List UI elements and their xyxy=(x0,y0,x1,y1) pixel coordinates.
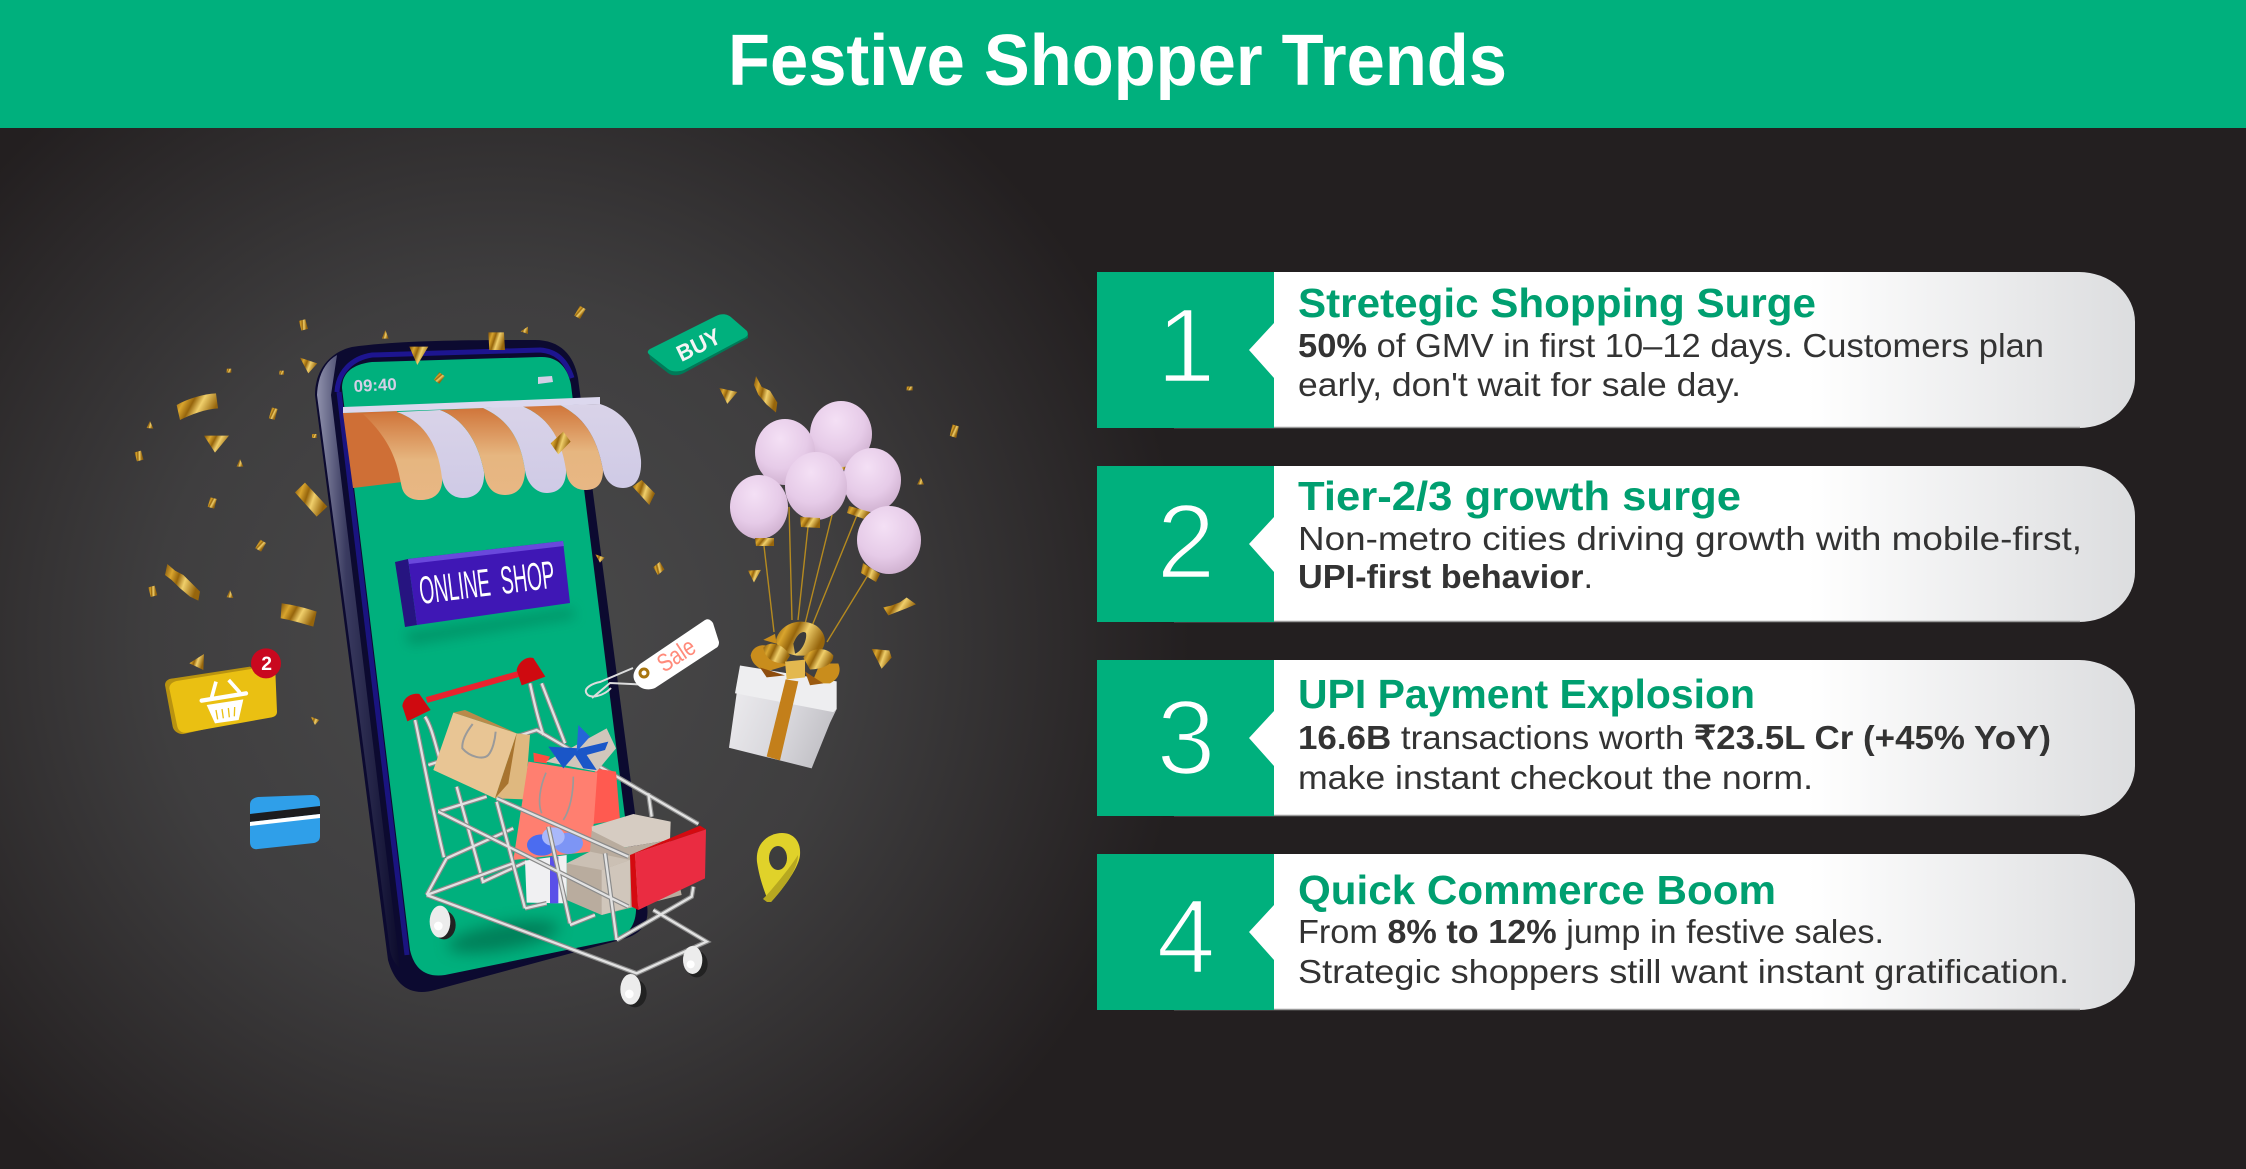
cart shadow xyxy=(445,914,561,960)
balloon gift xyxy=(729,401,921,768)
balloons xyxy=(730,401,921,582)
cart wheels xyxy=(430,906,708,1007)
sale tag: Sale xyxy=(652,633,701,678)
card 3 text line 1: 16.6B transactions worth ₹23.5L Cr (+45% YoY) xyxy=(1298,719,2051,756)
gift box xyxy=(729,622,840,768)
status time: 09:40 xyxy=(353,375,397,396)
card 3 heading: UPI Payment Explosion xyxy=(1298,671,1755,717)
stacked boxes xyxy=(567,814,682,915)
header band xyxy=(0,0,2246,128)
balloon strings xyxy=(764,507,868,642)
credit card icon xyxy=(250,795,320,849)
card 1 text line 1: 50% of GMV in first 10–12 days. Customers plan xyxy=(1298,327,2044,364)
card 4 heading: Quick Commerce Boom xyxy=(1298,867,1776,913)
red shopping bag xyxy=(513,753,620,860)
basket notification: 2 xyxy=(261,654,272,675)
battery icon xyxy=(538,376,553,384)
card 2 heading: Tier-2/3 growth surge xyxy=(1298,473,1741,519)
number 2: 2 xyxy=(1157,483,1215,601)
card 2 xyxy=(1097,466,2135,622)
phone xyxy=(315,340,648,992)
card 4 text line 1: From 8% to 12% jump in festive sales. xyxy=(1298,913,1884,950)
card 1 xyxy=(1097,272,2135,428)
illustration: online shopping phone xyxy=(135,306,959,1007)
card 2 text line 2: UPI-first behavior . xyxy=(1298,558,1593,595)
shopping cart xyxy=(402,658,708,1007)
small gift with blue ribbon xyxy=(546,725,616,772)
online shop sign: ONLINE SHOP xyxy=(417,554,557,613)
cart back wires xyxy=(415,683,698,883)
basket icon xyxy=(202,680,246,723)
buy tag xyxy=(648,314,748,375)
card 1 heading: Stretegic Shopping Surge xyxy=(1298,280,1816,326)
basket notification xyxy=(165,648,281,734)
card 3 text line 2: make instant checkout the norm. xyxy=(1298,759,1813,796)
tan shopping bag xyxy=(433,710,530,799)
number 3: 3 xyxy=(1157,679,1215,797)
red cart panel xyxy=(630,826,706,910)
awning xyxy=(343,397,641,500)
phone screen xyxy=(342,357,636,976)
card 1 text line 2: early, don't wait for sale day. xyxy=(1298,366,1741,403)
buy tag: BUY xyxy=(672,323,725,367)
number 4: 4 xyxy=(1157,878,1215,996)
shop sign shadow xyxy=(405,608,575,645)
card 2 text line 1: Non-metro cities driving growth with mobile-first, xyxy=(1298,520,2082,557)
number 1: 1 xyxy=(1157,287,1215,405)
location pin xyxy=(757,833,800,902)
cart front wires xyxy=(427,798,707,973)
cart handle xyxy=(402,658,545,721)
notification badge xyxy=(251,648,281,678)
title: Festive Shopper Trends xyxy=(728,21,1507,101)
online shop sign xyxy=(395,541,570,627)
gift bow xyxy=(751,622,840,685)
card 4 text line 2: Strategic shoppers still want instant gratification. xyxy=(1298,953,2069,990)
card 3 xyxy=(1097,660,2135,816)
sale tag xyxy=(586,619,719,698)
card 4 xyxy=(1097,854,2135,1010)
white gift with blue bow xyxy=(525,827,583,903)
confetti xyxy=(135,306,959,725)
